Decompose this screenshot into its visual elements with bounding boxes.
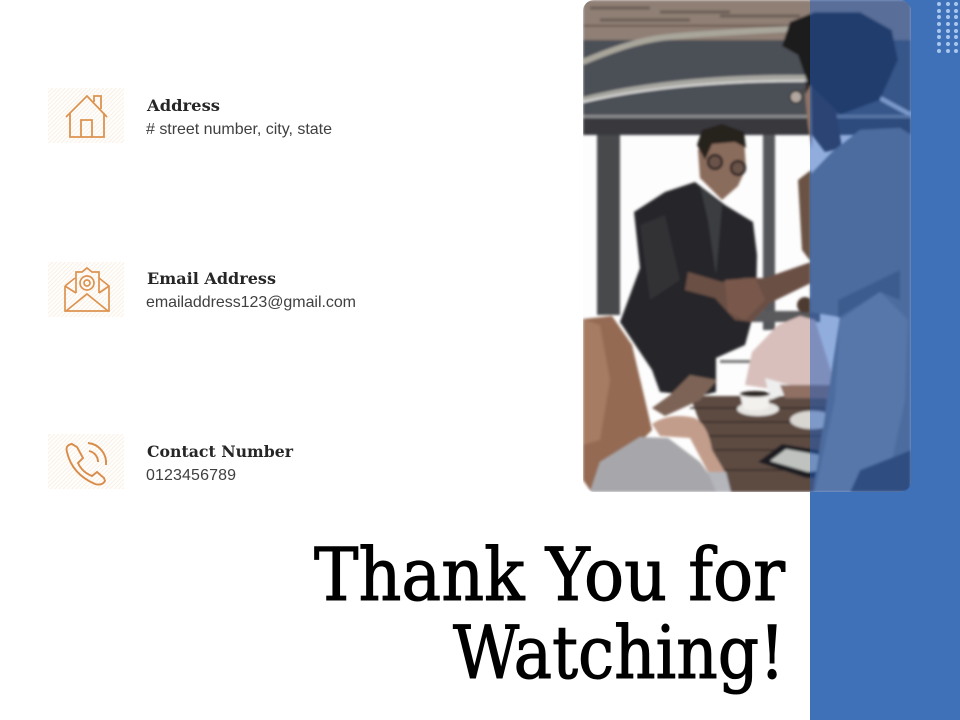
dot pattern [937,2,958,53]
email text: Email Address [147,269,276,288]
blue translucent overlay on photo [810,0,911,492]
man face [698,132,746,200]
address text: # street number, city, state [146,121,332,138]
handshake arms [685,262,811,322]
title [314,533,785,696]
contact text [146,442,294,484]
cups and tablet [737,402,779,416]
email text [146,269,356,311]
address text [146,96,332,138]
icon: envelope [48,262,124,317]
photo: handshake meeting [583,0,911,492]
address text: Address [146,96,220,115]
blue side band [810,0,960,720]
second man, partly outside overlay [798,170,811,262]
seated woman [583,316,652,490]
title: Thank You for [314,533,785,618]
icon: house [48,88,124,143]
email text: emailaddress123@gmail.com [146,294,356,311]
title: Watching! [453,611,785,696]
contact text: Contact Number [147,442,294,461]
standing man shirt [620,182,757,396]
icon: phone [48,434,124,489]
table [691,394,828,492]
seated pink jacket [744,314,832,390]
contact text: 0123456789 [146,467,236,484]
